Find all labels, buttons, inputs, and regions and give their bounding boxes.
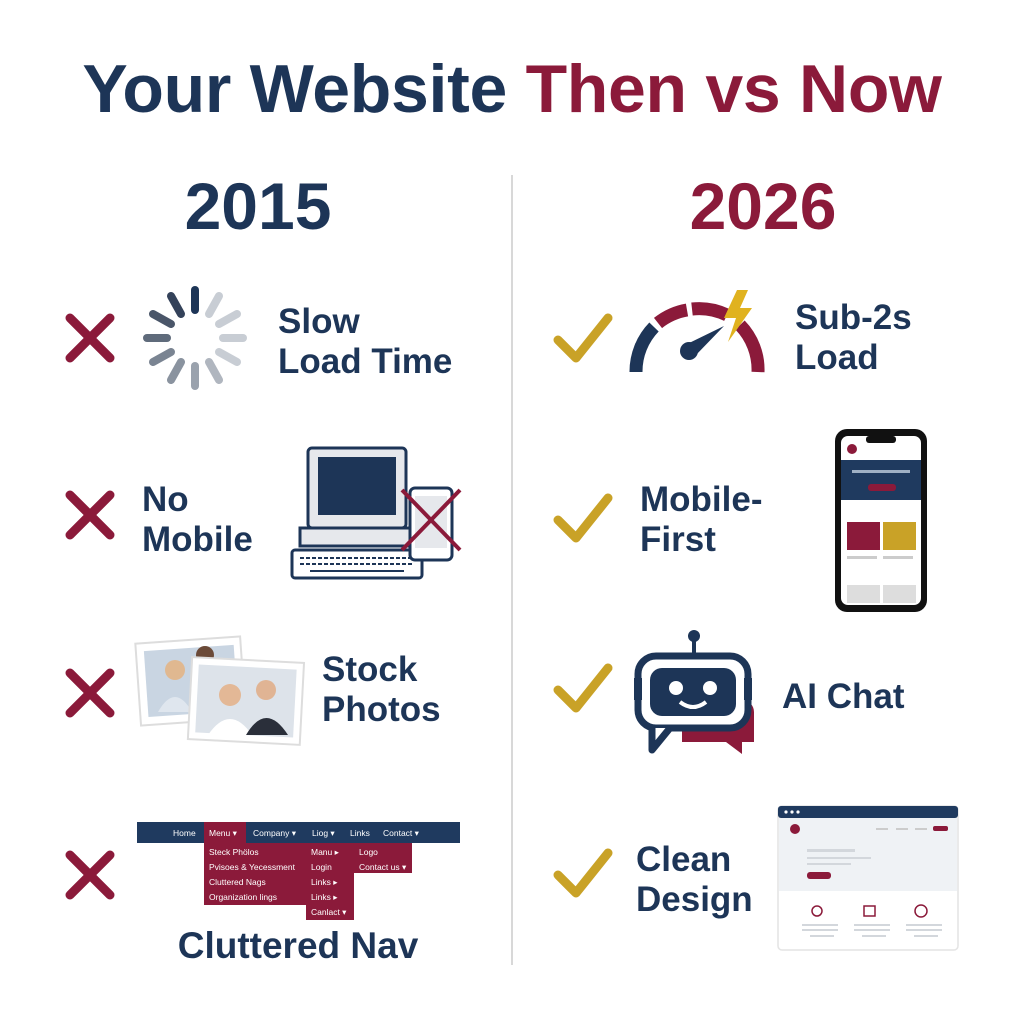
- cluttered nav mockup: Links ▸: [311, 892, 337, 902]
- cluttered nav mockup: Organization lings: [209, 892, 277, 902]
- text: cluttered nav: Cluttered Nav: [178, 925, 418, 966]
- text: stock photos: [322, 650, 441, 729]
- icon: check design: [558, 853, 608, 893]
- text: clean design: Design: [636, 880, 753, 919]
- icon: stock photos: [135, 636, 304, 745]
- cluttered nav mockup: Contact ▾: [383, 828, 419, 838]
- text: slow load time: [278, 302, 452, 381]
- cluttered nav mockup: Logo: [359, 847, 378, 857]
- heading: 2026: 2026: [690, 169, 836, 243]
- text: stock photos: Stock: [322, 650, 417, 689]
- panel: 2015 items: [66, 286, 462, 900]
- text: mobile-first: Mobile-: [640, 480, 762, 519]
- icon: x nav: [70, 855, 110, 895]
- text: sub-2s load: Sub-2s: [795, 298, 912, 337]
- text: ai chat: AI Chat: [782, 677, 904, 716]
- text: clean design: [636, 840, 753, 919]
- heading: 2015: 2015: [185, 169, 331, 243]
- panel: 2026 items: [554, 290, 959, 951]
- cluttered nav mockup: Cluttered Nags: [209, 877, 266, 887]
- cluttered nav mockup: Links: [350, 828, 370, 838]
- cluttered nav mockup: [137, 822, 460, 920]
- cluttered nav mockup: Menu ▾: [209, 828, 237, 838]
- cluttered nav mockup: Canlact ▾: [311, 907, 346, 917]
- cluttered nav mockup: Liog ▾: [312, 828, 335, 838]
- icon: check load: [558, 318, 608, 358]
- cluttered nav mockup: Home: [173, 828, 196, 838]
- icon: speedometer: [636, 309, 758, 372]
- cluttered nav mockup: Contact us ▾: [359, 862, 406, 872]
- cluttered nav mockup: Links ▸: [311, 877, 337, 887]
- text: slow load time: Slow: [278, 302, 360, 341]
- text: no mobile: Mobile: [142, 520, 253, 559]
- icon: spinner: [147, 290, 243, 386]
- text: no mobile: No: [142, 480, 189, 519]
- cluttered nav mockup: Steck Phölos: [209, 847, 259, 857]
- text: clean design: Clean: [636, 840, 731, 879]
- icon: x mobile: [70, 495, 110, 535]
- text: slow load time: Load Time: [278, 342, 452, 381]
- cluttered nav mockup: Login: [311, 862, 332, 872]
- icon: clean browser: [778, 806, 958, 950]
- cluttered nav mockup: Manu ▸: [311, 847, 339, 857]
- icon: x stock: [70, 673, 110, 713]
- cluttered nav mockup: Pvisoes & Yecessment: [209, 862, 295, 872]
- text: no mobile: [142, 480, 253, 559]
- text: sub-2s load: Load: [795, 338, 879, 377]
- cluttered nav mockup: Company ▾: [253, 828, 296, 838]
- icon: check ai: [558, 668, 608, 708]
- icon: x slow: [70, 318, 110, 358]
- text: stock photos: Photos: [322, 690, 441, 729]
- text: mobile-first: [640, 480, 762, 559]
- title: Your Website Then vs Now: [82, 51, 942, 127]
- text: sub-2s load: [795, 298, 912, 377]
- icon: check mobile: [558, 498, 608, 538]
- icon: smartphone: [835, 429, 927, 612]
- icon: robot chat: [634, 630, 754, 754]
- text: mobile-first: First: [640, 520, 716, 559]
- icon: old computer: [292, 448, 460, 578]
